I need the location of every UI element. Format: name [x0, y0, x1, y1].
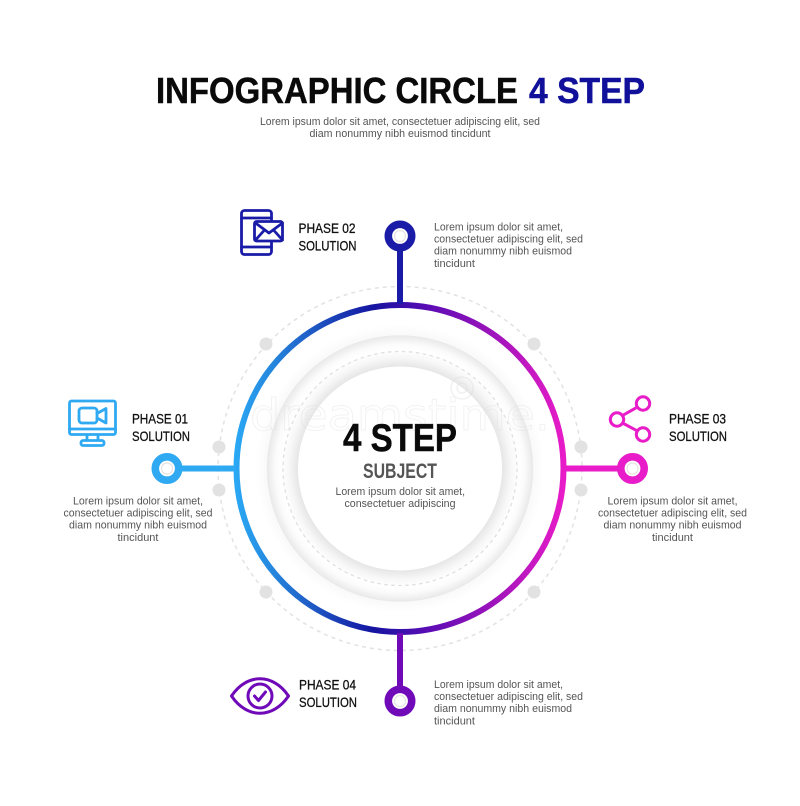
- shaded centre plates: [250, 318, 550, 618]
- icon: share: [610, 397, 650, 441]
- phase 02 label: PHASE 02: [298, 220, 356, 236]
- title: INFOGRAPHIC CIRCLE: [156, 70, 518, 111]
- phase 01 label: PHASE 01: [132, 410, 188, 426]
- title: 4 STEP: [529, 70, 645, 111]
- watermark: dreamstime.: [250, 390, 550, 441]
- phase 01 label: [132, 410, 190, 444]
- phase 03 text: Lorem ipsum dolor sit amet,: [608, 496, 738, 508]
- phase 04 node: [388, 633, 412, 713]
- phase 04 text: diam nonummy nibh euismod: [434, 703, 572, 715]
- subtitle: Lorem ipsum dolor sit amet, consectetuer adipiscing elit, sed: [260, 116, 540, 128]
- phase 03 label: PHASE 03: [669, 410, 726, 426]
- centre text: consectetuer adipiscing: [344, 498, 456, 510]
- phase 04 label: PHASE 04: [299, 676, 356, 692]
- phase 04 text: Lorem ipsum dolor sit amet,: [434, 679, 563, 691]
- phase 02 text: consectetuer adipiscing elit, sed: [434, 234, 583, 246]
- subtitle: diam nonummy nibh euismod tincidunt: [310, 128, 490, 140]
- phase 03 label: SOLUTION: [669, 428, 727, 444]
- phase 01 text: [64, 496, 212, 544]
- phase 04 text: consectetuer adipiscing elit, sed: [434, 691, 583, 703]
- outer dashed orbit with dots: [212, 286, 588, 650]
- phase 01 node: [155, 457, 235, 480]
- centre text: SUBJECT: [363, 460, 437, 483]
- phase 02 label: [298, 220, 356, 254]
- subtitle: [260, 116, 540, 140]
- centre text: [336, 417, 465, 510]
- phase 04 text: tincidunt: [434, 716, 475, 728]
- phase 02 label: SOLUTION: [298, 238, 356, 254]
- centre text: 4 STEP: [343, 417, 457, 460]
- phase 02 text: tincidunt: [434, 258, 475, 270]
- phase 03 label: [669, 410, 727, 444]
- phase 02 node: [388, 224, 412, 304]
- phase 04 text: [434, 679, 583, 728]
- phase 02 text: diam nonummy nibh euismod: [434, 246, 572, 258]
- phase 02 text: Lorem ipsum dolor sit amet,: [434, 222, 563, 234]
- centre text: Lorem ipsum dolor sit amet,: [336, 486, 465, 498]
- phase 03 text: diam nonummy nibh euismod: [604, 520, 742, 532]
- phase 03 text: consectetuer adipiscing elit, sed: [598, 508, 747, 520]
- phase 01 text: tincidunt: [118, 532, 158, 544]
- phase 01 label: SOLUTION: [132, 428, 190, 444]
- icon: phone with envelope: [242, 210, 282, 254]
- phase 01 text: diam nonummy nibh euismod: [69, 520, 207, 532]
- phase 04 label: SOLUTION: [299, 694, 357, 710]
- phase 01 text: Lorem ipsum dolor sit amet,: [73, 496, 203, 508]
- phase 03 node: [565, 457, 644, 480]
- main gradient ring: [236, 305, 564, 632]
- phase 04 label: [299, 676, 357, 710]
- icon: video monitor: [70, 401, 116, 446]
- phase 02 text: [434, 222, 583, 270]
- phase 03 text: tincidunt: [652, 532, 693, 544]
- phase 03 text: [598, 496, 747, 544]
- phase 01 text: consectetuer adipiscing elit, sed: [64, 508, 212, 520]
- icon: eye with check: [232, 679, 288, 713]
